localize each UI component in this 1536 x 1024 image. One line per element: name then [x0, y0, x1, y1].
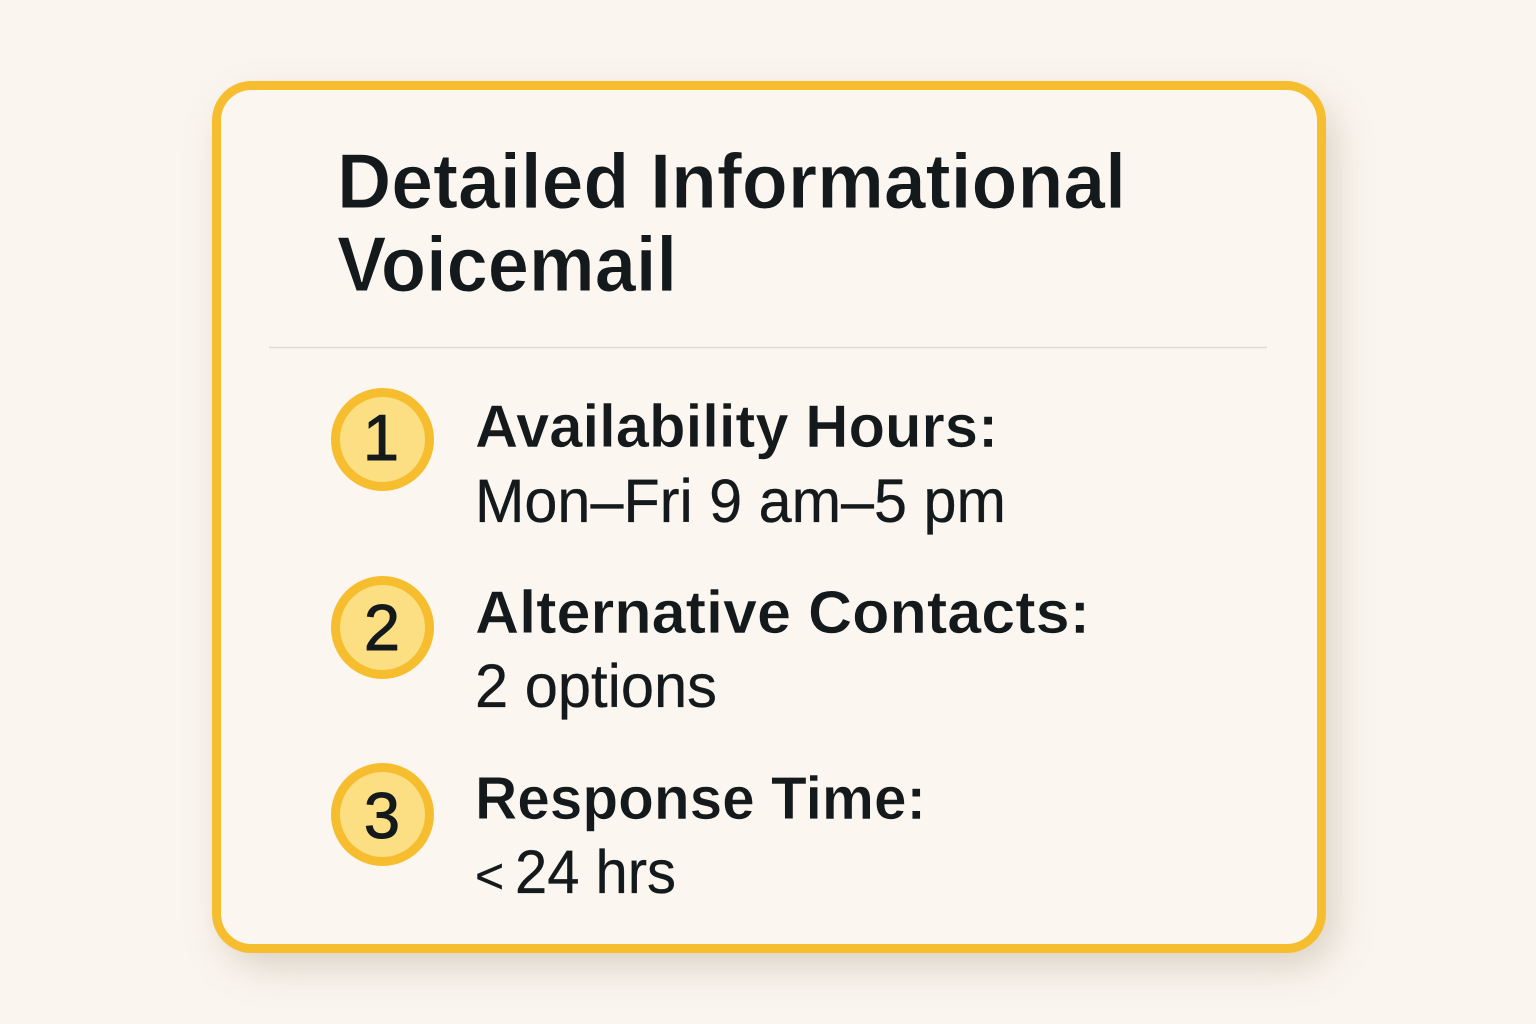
- icon: number 2 badge: 2: [364, 591, 400, 664]
- icon: number 1 badge: 1: [363, 401, 399, 474]
- label: availability hours: Availability Hours:: [475, 393, 998, 460]
- value: response time: 24 hrs: [515, 838, 676, 906]
- title: Voicemail: [337, 220, 677, 308]
- item 2: alternative contacts: [336, 579, 1090, 720]
- title: [337, 137, 1126, 308]
- value: alternative contacts: 2 options: [475, 652, 717, 720]
- value: response time: <: [475, 848, 504, 904]
- icon: number 2 badge: [336, 580, 430, 674]
- item 3: response time: [336, 765, 926, 906]
- title: Detailed Informational: [337, 137, 1126, 225]
- icon: number 3 badge: [336, 768, 430, 862]
- label: alternative contacts: Alternative Contacts:: [475, 579, 1090, 646]
- item 1: availability hours: [336, 392, 1006, 535]
- icon: number 3 badge: 3: [364, 779, 400, 852]
- panel: voicemail card: [216, 86, 1334, 966]
- value: availability hours: Mon–Fri 9 am–5 pm: [475, 467, 1006, 535]
- icon: number 1 badge: [336, 392, 430, 486]
- label: response time: Response Time:: [475, 765, 926, 832]
